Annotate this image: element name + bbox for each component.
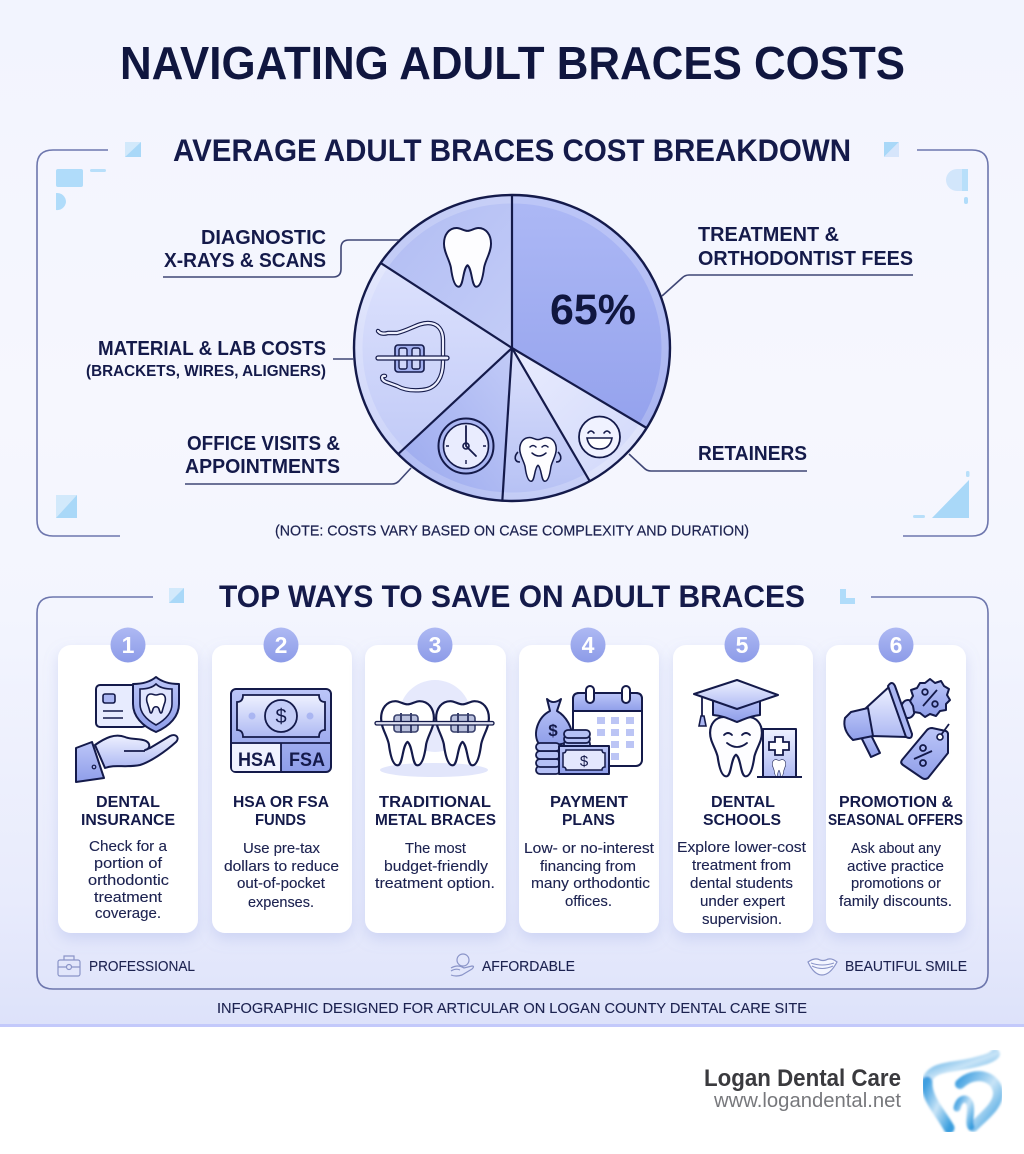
- number badge 6: 6: [890, 632, 902, 658]
- label: office visits and appointments: APPOINTMENTS: [185, 456, 340, 478]
- label: office visits and appointments: OFFICE VISITS &: [187, 433, 340, 455]
- panel: ways to save: [37, 578, 988, 989]
- card body: [375, 841, 495, 892]
- icon: hsa fsa banknote: [231, 689, 331, 772]
- label: retainers: RETAINERS: [698, 443, 807, 465]
- badge: professional: PROFESSIONAL: [89, 958, 195, 975]
- icon: clock: [438, 418, 494, 474]
- panel: cost breakdown: [36, 139, 989, 539]
- footer: tooth logo: [927, 1054, 998, 1128]
- card body: Explore lower-cost: [677, 840, 806, 856]
- heading: ways to save: TOP WAYS TO SAVE ON ADULT BRACES: [219, 578, 805, 614]
- label: material and lab costs: MATERIAL & LAB COSTS: [98, 338, 326, 360]
- card 1: dental insurance: [58, 628, 198, 933]
- card body: treatment option.: [375, 876, 495, 892]
- card body: supervision.: [702, 912, 782, 928]
- card 5: dental schools: [673, 628, 813, 933]
- card title: INSURANCE: [81, 812, 175, 829]
- card title: [81, 794, 175, 829]
- icon: insurance card, shield and hand: [76, 677, 179, 782]
- icon: tooth: [444, 228, 491, 287]
- value: 65%: 65%: [550, 286, 636, 334]
- card body: family discounts.: [839, 894, 952, 910]
- number badge 3: [418, 628, 452, 662]
- icon: smiley face: [579, 416, 620, 458]
- card body: treatment: [94, 890, 162, 906]
- icon: hsa fsa banknote: $: [275, 706, 287, 728]
- number badge 5: 5: [736, 632, 749, 658]
- number badge 1: [110, 628, 146, 662]
- icon: braces wire and bracket: [376, 323, 449, 390]
- card body: orthodontic: [88, 873, 169, 889]
- card title: [233, 794, 329, 829]
- card title: [550, 794, 629, 829]
- card title: [828, 794, 963, 829]
- pie chart: [352, 194, 672, 502]
- number badge 4: 4: [582, 632, 595, 658]
- card title: TRADITIONAL: [379, 794, 491, 811]
- icon: two teeth with metal braces: [375, 680, 494, 777]
- card body: [839, 841, 952, 910]
- card title: [703, 794, 781, 829]
- panel frame: [37, 150, 988, 536]
- card body: Use pre-tax: [243, 841, 321, 857]
- card 3: traditional metal braces: [365, 628, 506, 933]
- note: (NOTE: COSTS VARY BASED ON CASE COMPLEXITY AND DURATION): [275, 524, 749, 540]
- card body: The most: [405, 841, 466, 857]
- card body: Ask about any: [851, 841, 942, 857]
- card body: many orthodontic: [531, 876, 650, 892]
- label: diagnostic x-rays and scans: X-RAYS & SCANS: [164, 250, 326, 272]
- heading: cost breakdown: AVERAGE ADULT BRACES COST BREAKDOWN: [173, 132, 851, 168]
- badge: affordable: AFFORDABLE: [482, 958, 575, 975]
- panel frame: [37, 597, 988, 989]
- card title: PAYMENT: [550, 794, 629, 811]
- icon: calendar, money bag, coins, cash: $: [580, 753, 589, 770]
- corner decorations: [169, 588, 855, 604]
- card body: dental students: [690, 876, 793, 892]
- footer: logo text: www.logandental.net: [713, 1090, 901, 1112]
- icon: hsa fsa banknote: HSA: [238, 750, 276, 771]
- card title: SEASONAL OFFERS: [828, 812, 963, 829]
- card body: Low- or no-interest: [524, 841, 654, 857]
- icon: smiling tooth with retainer: [515, 437, 561, 481]
- icon: hsa fsa banknote: FSA: [289, 750, 325, 771]
- card body: promotions or: [851, 876, 941, 892]
- icon: graduate tooth and clinic: [694, 680, 802, 777]
- footer: logo text: Logan Dental Care: [704, 1065, 901, 1092]
- card body: [524, 841, 654, 910]
- label: treatment and orthodontist fees: ORTHODONTIST FEES: [698, 248, 913, 270]
- card body: [88, 839, 169, 922]
- number badge 5: [724, 628, 760, 662]
- card title: [375, 794, 496, 829]
- label: material and lab costs: (BRACKETS, WIRES, ALIGNERS): [86, 363, 326, 380]
- card body: financing from: [540, 859, 636, 875]
- icon: megaphone, discount badge, price tag: [844, 679, 950, 779]
- card 2: hsa or fsa funds: [212, 628, 352, 933]
- card title: HSA OR FSA: [233, 794, 329, 811]
- card body: Check for a: [89, 839, 168, 855]
- card body: under expert: [700, 894, 785, 910]
- card body: dollars to reduce: [224, 859, 339, 875]
- number badge 2: 2: [275, 632, 287, 658]
- number badge 3: 3: [429, 632, 441, 658]
- footer: logo text: [704, 1065, 901, 1112]
- card title: PROMOTION &: [839, 794, 953, 811]
- badge: beautiful smile: BEAUTIFUL SMILE: [845, 958, 967, 975]
- label: diagnostic x-rays and scans: [163, 227, 399, 277]
- card body: treatment from: [692, 858, 791, 874]
- label: diagnostic x-rays and scans: DIAGNOSTIC: [201, 227, 326, 249]
- card 4: payment plans: [519, 628, 659, 933]
- card body: [677, 840, 806, 928]
- label: treatment and orthodontist fees: TREATMENT &: [698, 224, 839, 246]
- card title: SCHOOLS: [703, 812, 781, 829]
- card title: DENTAL: [711, 794, 775, 811]
- card title: PLANS: [562, 812, 615, 829]
- label: treatment and orthodontist fees: [662, 224, 913, 296]
- label: retainers: [629, 443, 807, 471]
- number badge 4: [570, 628, 606, 662]
- card title: FUNDS: [255, 812, 306, 829]
- card body: [224, 841, 339, 911]
- card body: expenses.: [248, 895, 314, 911]
- number badge 6: [878, 628, 914, 662]
- card body: active practice: [847, 859, 944, 875]
- card body: portion of: [94, 856, 163, 872]
- corner decorations: [56, 142, 970, 518]
- icon: calendar, money bag, coins, cash: [536, 686, 642, 774]
- card title: METAL BRACES: [375, 812, 496, 829]
- card body: coverage.: [95, 906, 161, 922]
- card body: out-of-pocket: [237, 876, 325, 892]
- card body: budget-friendly: [384, 859, 489, 875]
- footer band: [0, 1024, 1024, 1027]
- card body: offices.: [565, 894, 612, 910]
- number badge 1: 1: [122, 632, 135, 658]
- card title: DENTAL: [96, 794, 160, 811]
- label: material and lab costs: [86, 338, 354, 380]
- icon: calendar, money bag, coins, cash: $: [548, 721, 558, 740]
- number badge 2: [264, 628, 298, 662]
- badge: professional: [58, 956, 195, 976]
- label: office visits and appointments: [185, 433, 411, 484]
- card 6: promotion and seasonal offers: [826, 628, 966, 933]
- credit caption: INFOGRAPHIC DESIGNED FOR ARTICULAR ON LOGAN COUNTY DENTAL CARE SITE: [217, 1000, 807, 1017]
- title: NAVIGATING ADULT BRACES COSTS: [120, 37, 905, 89]
- badge: affordable: [451, 954, 575, 976]
